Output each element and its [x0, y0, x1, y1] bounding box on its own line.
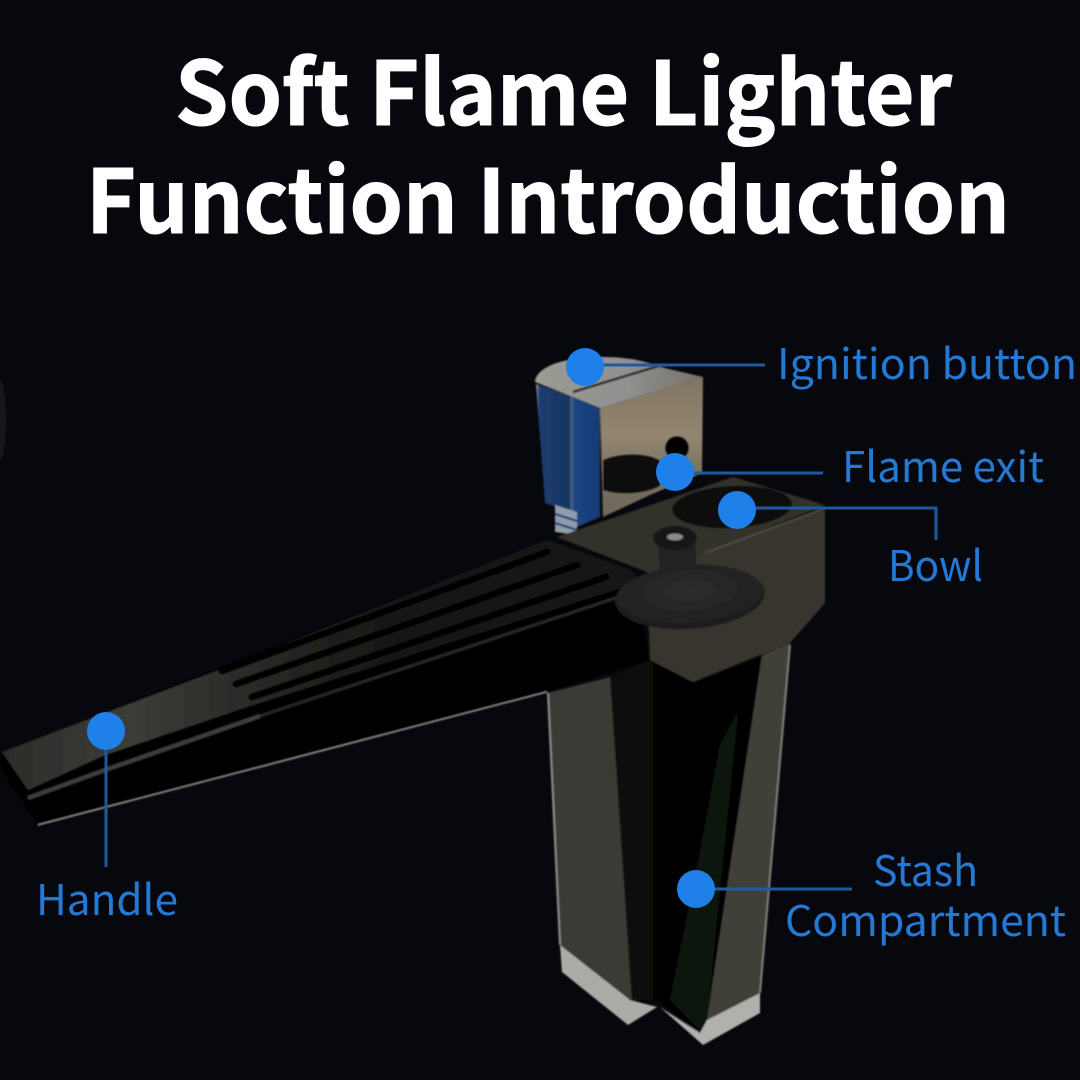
faint smudge at left edge — [0, 380, 6, 460]
lighter knob — [613, 526, 767, 634]
lighter head with ignition cap — [535, 357, 703, 535]
title — [86, 24, 1010, 259]
callout: flame exit: Flame exit — [842, 434, 1044, 495]
callout: flame exit — [656, 434, 1044, 495]
callout: handle — [36, 712, 178, 928]
title: Function Introduction — [86, 132, 1010, 259]
callout: stash compartment: Stash — [873, 838, 978, 899]
product illustration: lighter — [0, 357, 825, 1045]
lighter handle — [0, 540, 650, 825]
title: Soft Flame Lighter — [175, 24, 953, 151]
lighter base block with bowl — [557, 477, 825, 682]
callout: handle: Handle — [36, 867, 178, 928]
callout: stash compartment: Compartment — [785, 888, 1066, 949]
callout: ignition button — [566, 331, 1077, 392]
callout: bowl: Bowl — [888, 533, 983, 594]
callout: stash compartment — [677, 838, 1066, 949]
lighter leg and stash compartment — [548, 643, 790, 1045]
callout: ignition button: Ignition button — [777, 331, 1077, 392]
callout: bowl — [718, 491, 983, 594]
